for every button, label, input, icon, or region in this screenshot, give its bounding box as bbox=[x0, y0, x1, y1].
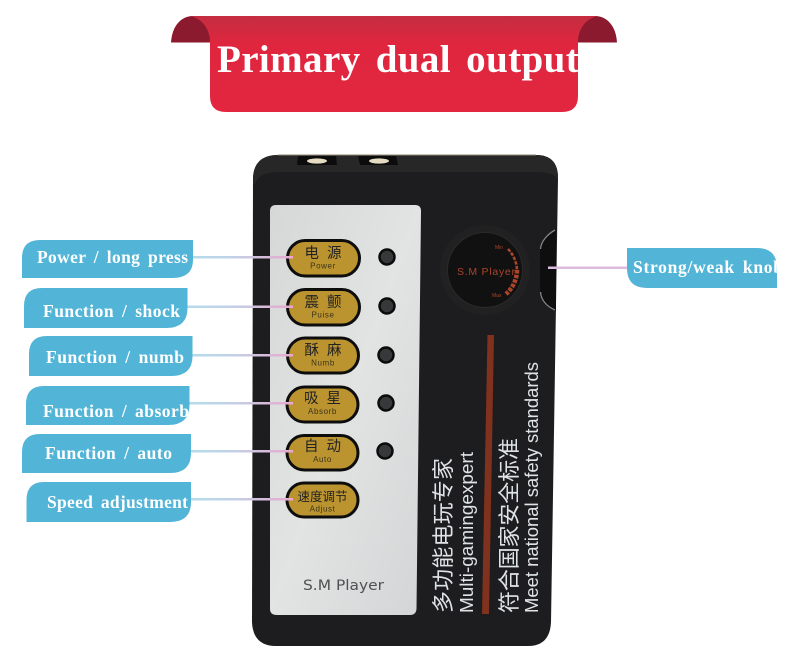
callout: auto bbox=[22, 434, 191, 473]
button: pulse bbox=[288, 290, 360, 325]
title text: Primary dual output bbox=[217, 38, 579, 81]
button: numb bbox=[288, 338, 358, 373]
vertical text: multi-function: Multi-gamingexpert bbox=[457, 452, 477, 613]
button: power: 电 源 bbox=[304, 245, 342, 262]
callout: numb: Function / numb bbox=[46, 347, 184, 367]
callout: knob: Strong/weak knob bbox=[633, 257, 783, 277]
button: auto bbox=[287, 436, 358, 470]
callout: absorb bbox=[26, 386, 190, 425]
intensity knob: Min bbox=[495, 245, 503, 251]
button: power: Power bbox=[310, 262, 336, 270]
device body bbox=[252, 155, 558, 646]
leader lines bbox=[187, 256, 628, 500]
vertical text: multi-function: 多功能电玩专家 bbox=[431, 458, 456, 613]
callout: numb bbox=[29, 336, 192, 376]
intensity knob: Max bbox=[492, 293, 502, 299]
button: pulse: 震 颤 bbox=[304, 293, 342, 311]
vertical text: safety standards bbox=[497, 362, 542, 613]
button: absorb: 吸 星 bbox=[304, 391, 341, 407]
button: absorb: Absorb bbox=[308, 407, 337, 416]
output jacks bbox=[297, 156, 398, 165]
callout: absorb: Function / absorb bbox=[43, 401, 189, 421]
vertical text: safety standards: 符合国家安全标准 bbox=[497, 438, 522, 613]
button: numb: 酥 麻 bbox=[304, 342, 342, 359]
panel brand text: S.M Player bbox=[303, 578, 384, 594]
indicator lights bbox=[378, 250, 394, 458]
button: pulse: Puise bbox=[311, 310, 335, 320]
knob notch bbox=[540, 229, 556, 311]
vertical text: safety standards: Meet national safety standards bbox=[522, 362, 542, 613]
callout: power bbox=[22, 240, 193, 278]
button: numb: Numb bbox=[311, 358, 335, 368]
callout: auto: Function / auto bbox=[45, 443, 172, 463]
button: adjust: 速度调节 bbox=[297, 489, 348, 504]
intensity knob bbox=[440, 225, 530, 315]
knob label: S.M Player bbox=[457, 266, 516, 278]
red stripe bbox=[482, 335, 494, 614]
callout: shock: Function / shock bbox=[43, 301, 180, 321]
button: power bbox=[288, 240, 360, 276]
callout: power: Power / long press bbox=[37, 247, 188, 267]
button: adjust bbox=[287, 483, 358, 517]
silver panel bbox=[270, 205, 421, 615]
button: auto: Auto bbox=[313, 455, 332, 464]
button: absorb bbox=[287, 387, 358, 422]
callout: knob bbox=[627, 248, 783, 288]
vertical text: multi-function bbox=[431, 452, 477, 613]
knob scale bbox=[508, 249, 517, 270]
title ribbon bbox=[171, 16, 617, 112]
callout: shock bbox=[24, 288, 188, 328]
button: adjust: Adjust bbox=[310, 504, 336, 514]
callout: speed: Speed adjustment bbox=[47, 492, 188, 512]
callout: speed bbox=[26, 482, 191, 522]
button: auto: 自 动 bbox=[304, 438, 341, 455]
